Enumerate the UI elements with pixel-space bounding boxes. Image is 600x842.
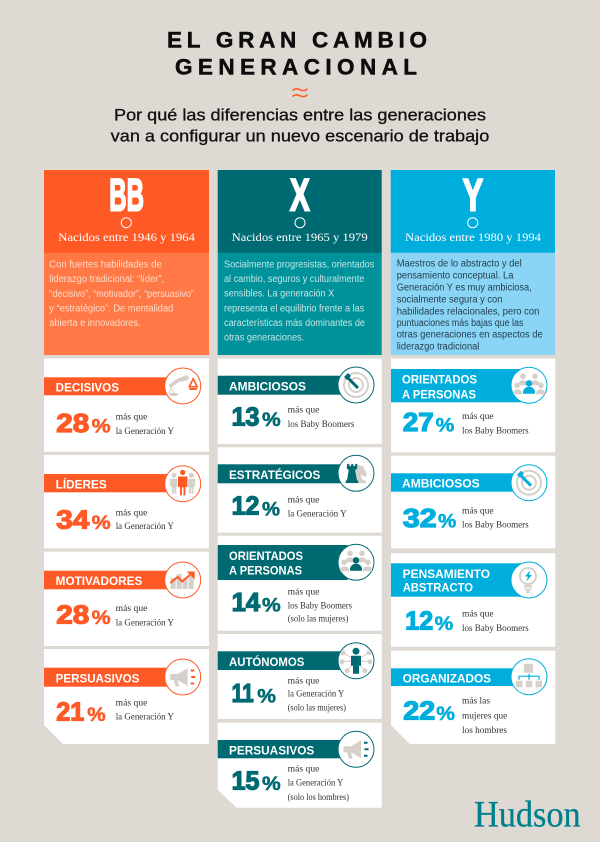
card: Y orientados a personas: A PERSONAS bbox=[402, 389, 476, 401]
card: X orientados a personas: % bbox=[262, 596, 281, 617]
panel: BB header: Nacidos entre 1946 y 1964 bbox=[58, 232, 195, 244]
card: Y organizados bbox=[391, 651, 555, 744]
panel: Y header: pensamiento conceptual. La bbox=[397, 270, 514, 281]
icon: person with network bbox=[338, 643, 374, 679]
card: Y orientados a personas: 27 bbox=[403, 407, 434, 437]
card: X autonomos: (solo las mujeres) bbox=[288, 703, 346, 714]
card: Y pensamiento abstracto: 12 bbox=[405, 605, 433, 635]
icon: target bbox=[511, 465, 547, 501]
card: Y orientados a personas: más que bbox=[462, 412, 494, 422]
panel: Y header: socialmente segura y con bbox=[397, 294, 502, 305]
card: X orientados a personas bbox=[218, 536, 382, 631]
panel: Y header: habilidades relacionales, pero con bbox=[397, 306, 539, 317]
panel: BB header: Con fuertes habilidades de bbox=[49, 259, 162, 270]
icon: lightbulb bbox=[511, 562, 547, 598]
panel: X header: características más dominantes de bbox=[224, 318, 365, 329]
card: X estrategicos: más que bbox=[288, 495, 319, 505]
panel: Y header: puntuaciones más bajas que las bbox=[397, 318, 523, 329]
icon: rising chart bbox=[165, 562, 201, 598]
card: X orientados a personas: ORIENTADOS bbox=[229, 551, 303, 563]
card: Y ambiciosos: 32 bbox=[403, 503, 437, 533]
card: BB motivadores: 28 bbox=[56, 599, 89, 629]
panel: BB header: y “estratégico”. De mentalidad bbox=[49, 304, 173, 315]
card: X ambiciosos: AMBICIOSOS bbox=[229, 382, 306, 394]
card: Y organizados: % bbox=[436, 704, 455, 725]
card: BB persuasivos: 21 bbox=[56, 696, 84, 726]
card: X estrategicos: % bbox=[262, 499, 280, 520]
card: BB persuasivos: la Generación Y bbox=[116, 713, 174, 723]
panel: BB header: abierta e innovadores. bbox=[49, 318, 141, 329]
subtitle: Por qué las diferencias entre las generaciones bbox=[114, 106, 486, 125]
card: X estrategicos bbox=[218, 447, 382, 533]
subtitle: van a configurar un nuevo escenario de trabajo bbox=[111, 127, 489, 146]
card: BB lideres: LÍDERES bbox=[56, 478, 107, 491]
panel: Y header: Maestros de lo abstracto y del bbox=[397, 259, 522, 270]
icon: target bbox=[338, 367, 374, 403]
card: Y organizados: 22 bbox=[403, 695, 435, 725]
card: Y pensamiento abstracto: PENSAMIENTO bbox=[403, 569, 490, 581]
card: BB decisivos bbox=[44, 358, 209, 452]
card: X estrategicos: 12 bbox=[232, 491, 259, 521]
card: Y orientados a personas: los Baby Boomers bbox=[462, 426, 529, 436]
card: X persuasivos: la Generación Y bbox=[288, 779, 343, 789]
panel: X header: Socialmente progresistas, orientados bbox=[224, 259, 374, 270]
card: X persuasivos: PERSUASIVOS bbox=[229, 745, 315, 757]
panel: Y header bbox=[391, 170, 555, 355]
card: Y organizados: mujeres que bbox=[462, 711, 507, 721]
card: X ambiciosos bbox=[218, 358, 382, 444]
card: Y pensamiento abstracto: los Baby Boomers bbox=[462, 624, 529, 634]
panel: Y header: liderazgo tradicional bbox=[397, 341, 479, 352]
icon: megaphone bbox=[165, 659, 201, 695]
card: X persuasivos: (solo los hombres) bbox=[288, 792, 349, 803]
card: X orientados a personas: (solo las mujeres) bbox=[288, 614, 348, 625]
card: Y pensamiento abstracto bbox=[391, 553, 555, 647]
panel: BB header: “decisivo”, “motivador”, “persuasivo” bbox=[49, 289, 194, 300]
logo: Hudson: Hudson bbox=[474, 795, 581, 836]
icon: leader with team bbox=[165, 466, 201, 502]
panel: X header: sensibles. La generación X bbox=[224, 289, 335, 300]
card: X ambiciosos: los Baby Boomers bbox=[288, 420, 355, 430]
card: BB motivadores: % bbox=[92, 608, 111, 629]
card: X autonomos: la Generación Y bbox=[288, 690, 344, 700]
panel: Y header: Generación Y es muy ambiciosa, bbox=[397, 282, 532, 293]
card: X autonomos: más que bbox=[288, 676, 319, 686]
panel: Y header: Nacidos entre 1980 y 1994 bbox=[405, 232, 541, 244]
card: X persuasivos: más que bbox=[288, 765, 319, 775]
card: BB motivadores: más que bbox=[116, 604, 147, 614]
card: BB persuasivos: % bbox=[87, 705, 106, 726]
card: Y ambiciosos: % bbox=[438, 512, 456, 533]
card: Y pensamiento abstracto: ABSTRACTO bbox=[403, 583, 473, 595]
card: BB lideres: % bbox=[92, 513, 111, 534]
card: X persuasivos: % bbox=[262, 774, 281, 795]
card: BB motivadores: la Generación Y bbox=[116, 618, 174, 628]
icon: approx divider bbox=[292, 89, 308, 97]
card: BB motivadores: MOTIVADORES bbox=[56, 576, 143, 588]
card: Y organizados: ORGANIZADOS bbox=[403, 673, 491, 685]
panel: BB header bbox=[44, 170, 209, 355]
panel: X header: otras generaciones. bbox=[224, 333, 304, 344]
card: BB lideres: la Generación Y bbox=[116, 522, 174, 532]
card: BB persuasivos: más que bbox=[116, 699, 147, 709]
panel: X header: al cambio, seguros y culturalmente bbox=[224, 274, 365, 285]
card: BB decisivos: 28 bbox=[56, 408, 89, 438]
card: X orientados a personas: A PERSONAS bbox=[229, 565, 302, 577]
card: Y organizados: más las bbox=[462, 696, 490, 706]
title: GENERACIONAL bbox=[175, 54, 417, 79]
panel: X header: representa el equilibrio frente a las bbox=[224, 303, 364, 314]
panel: X header: X bbox=[290, 170, 310, 221]
panel: Y header: Y bbox=[463, 170, 483, 221]
card: BB motivadores bbox=[44, 552, 209, 646]
panel: X header bbox=[218, 170, 382, 355]
card: Y ambiciosos: AMBICIOSOS bbox=[402, 479, 480, 491]
card: BB lideres: 34 bbox=[56, 504, 90, 534]
card: X autonomos: % bbox=[257, 687, 276, 708]
card: Y pensamiento abstracto: más que bbox=[462, 610, 494, 620]
card: BB decisivos: DECISIVOS bbox=[56, 383, 119, 395]
panel: BB header: liderazgo tradicional: “líder”, bbox=[49, 274, 164, 285]
icon: chess pieces bbox=[338, 455, 374, 491]
card: BB decisivos: % bbox=[92, 417, 111, 438]
card: X autonomos bbox=[218, 634, 382, 719]
card: BB persuasivos bbox=[44, 649, 209, 744]
title: EL GRAN CAMBIO bbox=[167, 28, 427, 53]
icon: org chart bbox=[511, 659, 547, 695]
card: BB lideres: más que bbox=[116, 508, 147, 518]
card: BB lideres bbox=[44, 455, 209, 548]
card: Y ambiciosos bbox=[391, 456, 555, 548]
card: Y organizados: los hombres bbox=[462, 726, 507, 736]
panel: X header: Nacidos entre 1965 y 1979 bbox=[232, 232, 368, 244]
card: X ambiciosos: 13 bbox=[232, 401, 259, 431]
card: X orientados a personas: más que bbox=[288, 587, 319, 597]
icon: group of people bbox=[338, 544, 374, 580]
card: X ambiciosos: % bbox=[262, 410, 281, 431]
card: BB decisivos: la Generación Y bbox=[116, 427, 174, 437]
card: Y ambiciosos: más que bbox=[462, 506, 494, 516]
card: X persuasivos: 15 bbox=[232, 765, 259, 795]
card: X orientados a personas: los Baby Boomers bbox=[288, 601, 352, 611]
card: X autonomos: AUTÓNOMOS bbox=[229, 656, 305, 669]
icon: megaphone bbox=[338, 731, 374, 767]
card: BB persuasivos: PERSUASIVOS bbox=[56, 673, 140, 685]
panel: Y header: otras generaciones en aspectos de bbox=[397, 330, 543, 341]
card: Y pensamiento abstracto: % bbox=[435, 614, 453, 635]
card: Y orientados a personas bbox=[391, 358, 555, 452]
card: Y orientados a personas: % bbox=[436, 416, 454, 437]
card: X estrategicos: ESTRATÉGICOS bbox=[229, 469, 321, 482]
card: X estrategicos: la Generación Y bbox=[288, 510, 347, 520]
card: X persuasivos bbox=[218, 723, 382, 808]
card: X ambiciosos: más que bbox=[288, 406, 319, 416]
card: Y ambiciosos: los Baby Boomers bbox=[462, 521, 529, 531]
card: X autonomos: 11 bbox=[232, 678, 254, 708]
subtitle bbox=[111, 106, 489, 146]
card: X orientados a personas: 14 bbox=[232, 587, 261, 617]
icon: group of people bbox=[511, 367, 547, 403]
title bbox=[167, 28, 427, 79]
panel: BB header: BB bbox=[109, 170, 144, 221]
icon: scales bbox=[165, 368, 201, 404]
card: BB decisivos: más que bbox=[116, 412, 147, 422]
card: Y orientados a personas: ORIENTADOS bbox=[402, 374, 477, 386]
